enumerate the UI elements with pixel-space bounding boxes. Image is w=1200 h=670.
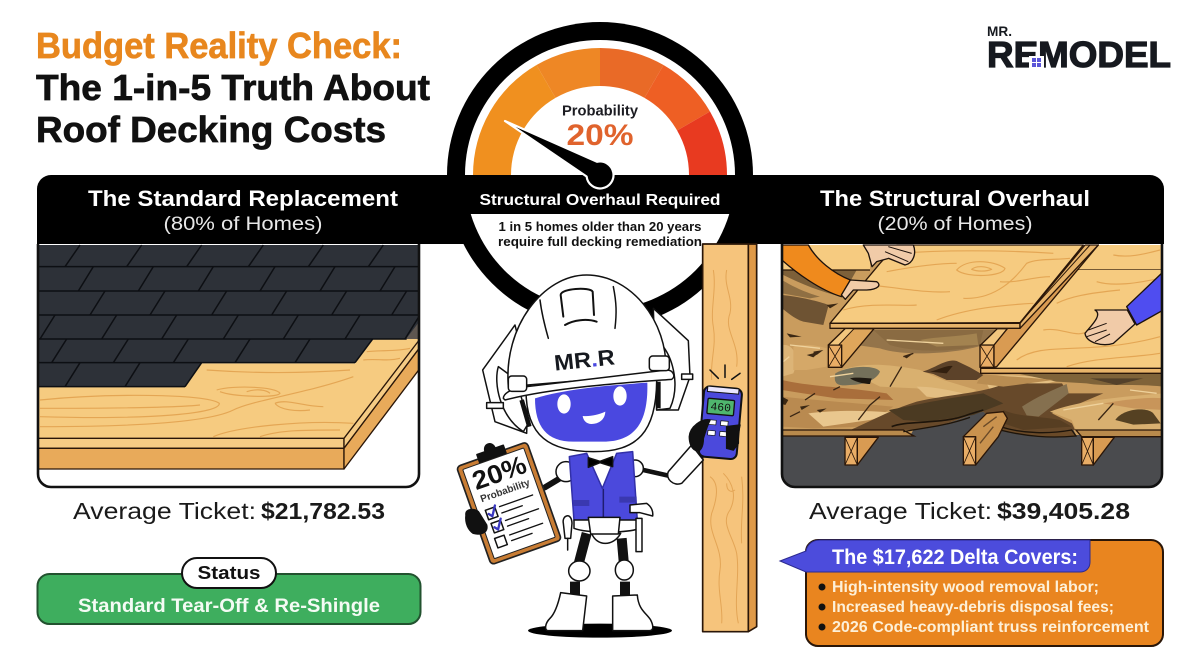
average ticket: overhaul: Average Ticket: bbox=[809, 498, 992, 524]
status box: Standard Tear-Off & Re-Shingle bbox=[78, 596, 380, 617]
moisture meter bbox=[689, 365, 742, 460]
rot band bbox=[852, 383, 1103, 433]
status pill bbox=[182, 558, 276, 588]
heading: structural overhaul: The Structural Overhaul bbox=[820, 186, 1090, 211]
boots bbox=[546, 593, 653, 631]
callout: delta covers bbox=[780, 540, 1163, 646]
shingles bbox=[37, 245, 420, 387]
mascot: robot inspector bbox=[453, 275, 742, 638]
moisture meter: 460 bbox=[710, 402, 731, 416]
callout header: The $17,622 Delta Covers: bbox=[832, 546, 1078, 569]
panel: standard replacement illustration bbox=[37, 244, 420, 487]
gauge label: 20% bbox=[566, 119, 634, 152]
callout bullet list: High-intensity wood removal labor; bbox=[832, 579, 1099, 596]
black header band bbox=[37, 175, 1164, 244]
joists below the deck bbox=[845, 412, 1114, 465]
callout header bbox=[780, 540, 1090, 572]
title: Budget Reality Check: bbox=[36, 25, 402, 66]
heading: structural overhaul: (20% of Homes) bbox=[878, 214, 1032, 235]
rotten OSB decking bbox=[780, 245, 1163, 437]
wood post bbox=[703, 244, 757, 632]
callout bullet list bbox=[818, 579, 1150, 636]
hard hat: MR.R bbox=[553, 344, 616, 376]
wood roof decking bbox=[37, 339, 420, 469]
hands with sleeves bbox=[780, 245, 1163, 345]
average ticket: overhaul: $39,405.28 bbox=[997, 498, 1130, 524]
heading: standard replacement: The Standard Replacement bbox=[88, 186, 399, 211]
title: Roof Decking Costs bbox=[36, 109, 386, 150]
decking strips at break bbox=[780, 430, 1163, 437]
panel: structural overhaul illustration bbox=[780, 244, 1163, 490]
legs bbox=[569, 533, 633, 595]
hard hat bbox=[503, 275, 674, 400]
average ticket: standard: $21,782.53 bbox=[261, 498, 385, 524]
heading: standard replacement: (80% of Homes) bbox=[164, 214, 322, 235]
clipboard: 20% bbox=[468, 449, 530, 496]
dark crawl space bbox=[780, 410, 1163, 490]
gauge status text: Structural Overhaul Required bbox=[480, 192, 720, 209]
gauge label: Probability bbox=[562, 102, 639, 120]
title bbox=[36, 25, 430, 150]
tool belt bbox=[563, 503, 653, 552]
average ticket: standard: Average Ticket: bbox=[73, 498, 256, 524]
gauge status text bbox=[480, 192, 720, 249]
callout bullet list: 2026 Code-compliant truss reinforcement bbox=[832, 619, 1150, 636]
logo: Mr. Remodel: REMODEL bbox=[987, 34, 1171, 75]
shadow bbox=[528, 624, 672, 638]
glove on clipboard bbox=[466, 509, 487, 534]
gauge segments bbox=[473, 48, 727, 175]
gauge needle bbox=[505, 121, 614, 188]
status box bbox=[38, 558, 420, 624]
arms bbox=[545, 445, 703, 487]
logo: Mr. Remodel: MR. bbox=[987, 23, 1012, 39]
heading: structural overhaul bbox=[820, 186, 1090, 235]
heading: standard replacement bbox=[88, 186, 399, 235]
vest bbox=[569, 452, 637, 521]
gauge label bbox=[562, 102, 639, 152]
new plywood sheets bbox=[780, 245, 1163, 373]
status pill: Status bbox=[198, 563, 260, 583]
callout bullet list: Increased heavy-debris disposal fees; bbox=[832, 599, 1114, 616]
gauge status text: 1 in 5 homes older than 20 years bbox=[498, 220, 702, 234]
head bbox=[526, 377, 657, 452]
clipboard bbox=[453, 432, 562, 565]
clipboard: Probability bbox=[479, 477, 532, 505]
title: The 1-in-5 Truth About bbox=[36, 67, 430, 108]
ear muffs bbox=[483, 308, 693, 433]
gauge status text: require full decking remediation bbox=[498, 235, 702, 249]
gauge: probability dial bbox=[447, 22, 753, 328]
